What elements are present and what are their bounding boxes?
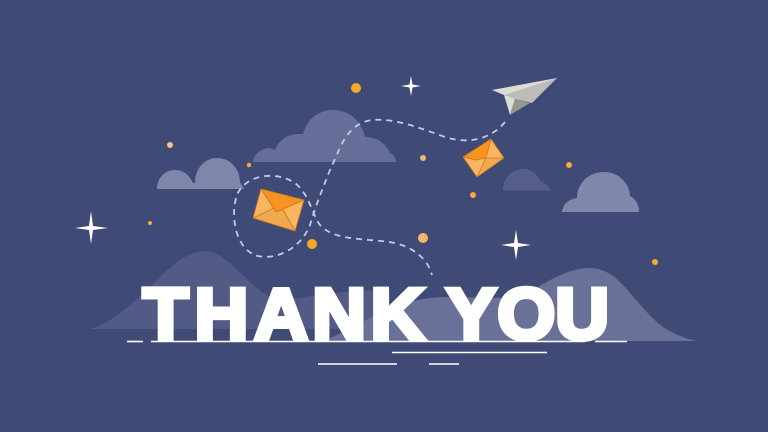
icon: paper plane <box>492 78 557 115</box>
orange dots <box>148 83 658 265</box>
cloud: left <box>157 158 244 189</box>
baseline rules <box>127 342 627 364</box>
icon: small envelope <box>463 139 504 177</box>
cloud: centre <box>253 110 396 162</box>
cloud: small dim <box>503 169 551 190</box>
icon: large envelope <box>253 189 304 231</box>
title: THANK YOU <box>0 275 609 355</box>
dashed flight path <box>234 120 505 275</box>
mountains <box>90 251 697 341</box>
cloud: right <box>562 172 639 212</box>
sparkle stars <box>75 76 531 260</box>
